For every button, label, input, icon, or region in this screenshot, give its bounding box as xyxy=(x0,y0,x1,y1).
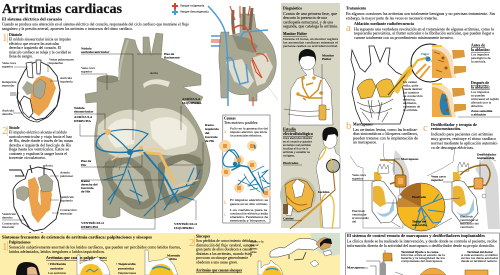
bottom panel: symptoms: provocan un síncope generalmente xyxy=(196,256,248,260)
labels: big heart: DERECHA xyxy=(74,119,92,123)
section 1: diastole: Diástole xyxy=(9,33,22,37)
panel: diagnosis: descarta la presencia de una xyxy=(283,16,327,20)
bottom panel: symptoms: • Fibrilación xyxy=(48,262,66,266)
labels: big heart: His xyxy=(81,163,87,167)
intro text xyxy=(2,18,189,32)
labels: heart in systole: Contracción xyxy=(2,222,19,226)
panel: diagnosis: Estudio xyxy=(283,128,296,132)
labels: big heart: Haz de xyxy=(81,159,92,163)
panel: remote monitoring: Terminal fijado a la cama. xyxy=(401,250,439,254)
intro text: Cuando se produce una alteración en el sistema eléctrico del corazón, responsable del ciclo cardíaco que mantiene el flujo xyxy=(2,22,189,28)
labels: before and after ablation: afectado por la xyxy=(471,100,492,104)
section b: pacemaker xyxy=(346,120,419,144)
labels: big heart: VENTRÍCULO xyxy=(174,221,197,226)
text: catheter: de conducción xyxy=(403,94,423,98)
small heart: blood flow xyxy=(208,6,278,106)
panel: remote monitoring: revisa los datos enviados xyxy=(461,256,499,260)
panel: remote monitoring: Marcapasos xyxy=(347,266,365,270)
panel: causes: alterados. Fenómenos de xyxy=(230,215,269,219)
labels: before and after ablation xyxy=(471,44,499,116)
labels: big heart: Bachmann xyxy=(164,56,180,60)
panel: causes: c xyxy=(224,213,227,218)
panel: causes: genera en un sitio erróneo. xyxy=(230,202,268,206)
section 2: systole: contraen y expulsan la sangre hacia el xyxy=(9,152,67,156)
labels: before and after ablation: ablación. xyxy=(471,104,483,108)
text: catheter: eléctrica, xyxy=(403,98,415,102)
panel: remote monitoring: El sistema de control remoto de marcapasos y desfibriladores implantables xyxy=(347,234,486,238)
section b: pacemaker: b xyxy=(346,120,352,132)
section a: radiofrequency ablation: Ablación mediante radiofrecuencia xyxy=(354,22,414,26)
labels: heart in diastole: Aurícula xyxy=(60,76,72,80)
labels: big heart: IZQUIERDO xyxy=(174,226,194,230)
bottom panel: symptoms: Las aurículas xyxy=(48,271,67,275)
text: catheter: Un catéter xyxy=(403,80,418,84)
labels: heart in systole: Arteria xyxy=(60,170,70,174)
section 1: diastole: eléctrico que recorre las aurículas xyxy=(9,42,59,46)
panel: remote monitoring: componentes del marcapasos. xyxy=(401,259,443,263)
magnifier: catheter tip: Calor xyxy=(421,52,430,56)
bottom panel: symptoms: 1 xyxy=(2,241,8,253)
labels: heart in diastole: Venas pulmonares xyxy=(49,58,74,62)
panel: causes: impulso eléctrico que inicia xyxy=(230,130,267,134)
labels: big heart: de His xyxy=(81,190,91,194)
labels: big heart: Haz de xyxy=(164,52,175,56)
labels: before and after ablation: a ablación xyxy=(471,112,486,116)
text: syncope note: y xyxy=(250,254,252,258)
labels: big heart: izquierda xyxy=(205,127,219,131)
labels: before and after ablation: Los impulsos xyxy=(471,90,490,94)
labels: heart in diastole: Vena cava xyxy=(2,61,16,65)
section b: pacemaker: pueden tratarse con la implantación de xyxy=(353,136,418,140)
conduction system pathways xyxy=(96,129,200,216)
panel: diagnosis: origen. xyxy=(283,154,295,158)
panel: diagnosis: Monitor Holter xyxy=(283,32,307,36)
defibrillator body illustration: superior xyxy=(431,178,444,182)
patient and devices xyxy=(364,261,384,275)
panel: remote monitoring: información directa de la actividad del marcapasos o desfibrilador desde su propio domicilio. xyxy=(347,244,495,248)
panel: diagnosis: Unos electrodos situados xyxy=(283,136,313,140)
magnifier: electrode: miocardio xyxy=(412,223,427,227)
panel: diagnosis: en el corazón y guiados xyxy=(283,140,313,144)
panel: diagnosis xyxy=(280,3,340,229)
text: catheter xyxy=(403,80,423,112)
labels: big heart: fascículo xyxy=(81,186,94,190)
labels: big heart: Nódulo xyxy=(74,106,85,110)
panel: diagnosis: electrofisiológico xyxy=(283,132,313,136)
section c: defibrillator: muy graves, restituye el ritmo cardíaco xyxy=(431,137,496,142)
labels: big heart xyxy=(74,46,219,230)
magnifier: electrode xyxy=(386,183,460,231)
section 1: diastole: llena de sangre. xyxy=(9,54,33,58)
section c: defibrillator: normal mediante la aplicación automáti- xyxy=(431,142,499,146)
labels: big heart: Nódulo xyxy=(81,46,92,50)
labels: before and after ablation: Después de xyxy=(471,81,489,85)
labels: heart in systole: derecho xyxy=(2,216,13,220)
labels: big heart: Vena cava xyxy=(81,66,95,70)
pacemaker body illustration: superior xyxy=(352,176,364,180)
legend: Sangre desoxigenada xyxy=(180,10,209,14)
text: syncope note: otras xyxy=(250,250,257,254)
bottom panel: symptoms: Mareado xyxy=(167,254,180,258)
section a: radiofrequency ablation: taquicardia paroxística, el flutter auricular o la fibrilación auricular, que pueden llegar a xyxy=(354,32,494,36)
panel: diagnosis: Diagnóstico xyxy=(283,6,302,10)
panel: causes: reentrada y bloqueos. xyxy=(230,218,266,222)
bottom panel: symptoms: Sensación subjetivamente anormal de los latidos cardíacos, que pueden ser percibidos como latidos fuertes, xyxy=(9,246,181,250)
bottom panel: symptoms: Palpitaciones xyxy=(118,271,137,275)
icon: heart paroxysmal tachycardia xyxy=(145,250,178,275)
section 1: diastole xyxy=(2,32,71,58)
defibrillator body illustration: implantable xyxy=(477,156,495,160)
section 2: systole: auriculoventricular y viaja hacia el haz xyxy=(9,135,72,139)
labels: electrophysiology xyxy=(283,161,330,220)
icon: heart fibrillation xyxy=(77,255,110,275)
text: syncope note xyxy=(250,240,264,258)
labels: big heart: DERECHO xyxy=(81,225,99,229)
text: catheter: la arritmia. xyxy=(403,108,418,112)
section c: defibrillator: ca de descargas eléctricas. xyxy=(431,146,474,150)
panel: remote monitoring: Terminal del doctor xyxy=(467,250,493,254)
heart with catheter line drawing xyxy=(351,46,416,124)
text: syncope note: ciales o la xyxy=(250,240,264,244)
pacemaker body illustration: Marcapasos xyxy=(401,157,419,161)
panel: diagnosis: paciente realiza su actividad normal. xyxy=(283,44,338,48)
labels: big heart: superior xyxy=(81,70,93,74)
labels: heart in systole xyxy=(2,164,77,229)
holter patient: Monitor xyxy=(322,54,335,58)
section 2: systole: torrente circulatorio. xyxy=(9,156,46,160)
inset heart with electrodes xyxy=(280,177,316,216)
defibrillator body illustration: ventricular al xyxy=(460,218,478,222)
section c: defibrillator: Indicado para pacientes con arritmias xyxy=(431,132,494,136)
panel: causes: Los caminos para la xyxy=(230,208,268,212)
panel: treatment intro: embargo, la mayor parte de las veces es necesario tratarlas. xyxy=(346,16,438,22)
labels: heart in diastole: izquierda xyxy=(60,80,73,84)
pacemaker body illustration: Vena cava xyxy=(352,173,366,177)
intro text: El sistema eléctrico del corazón xyxy=(2,18,63,22)
section a: radiofrequency ablation: Ha supuesto una verdadera revolución en el tratamiento de algunas arritmias, como la xyxy=(354,28,494,32)
legend: Sangre oxigenada xyxy=(180,4,205,8)
bottom panel: symptoms: obedecen a una causa grave. xyxy=(196,260,238,264)
bottom panel: symptoms: Síncopes xyxy=(196,234,211,238)
panel: causes xyxy=(219,115,271,223)
labels: before and after ablation: Los impulsos xyxy=(471,52,490,56)
section 1: diastole: El nódulo sinoauricular inicia un impulso xyxy=(9,38,71,42)
home terminal xyxy=(383,250,392,261)
panel: causes: a xyxy=(224,130,227,135)
icon: person with palpitations xyxy=(16,262,40,275)
section b: pacemaker: un marcapasos. xyxy=(353,140,377,144)
before and after ablation panels xyxy=(432,45,500,117)
big heart with conduction system xyxy=(85,33,210,219)
labels: heart in diastole: superior xyxy=(2,64,14,68)
bottom panel: symptoms: 2 xyxy=(189,237,194,249)
bottom panel: symptoms: Síntomas frecuentes de existencia de arritmia cardíaca: palpitaciones y síncopes xyxy=(2,236,153,240)
text: catheter: puede destruir xyxy=(403,87,423,91)
labels: big heart: IZQUIERDA xyxy=(182,101,202,105)
panel: diagnosis: Consta de una primera fase, que xyxy=(283,12,337,17)
text: catheter: los caminos xyxy=(403,90,420,94)
section 2: systole: derecha e izquierda del fascículo de His xyxy=(9,144,72,148)
section 2: systole: Sístole xyxy=(9,126,20,130)
diagram: heart in diastole xyxy=(10,60,60,122)
panel: treatment intro: Tratamiento xyxy=(346,6,366,10)
diagram: heart in systole xyxy=(9,165,61,240)
bottom panel: symptoms: auricular xyxy=(50,266,64,270)
labels: before and after ablation: la ablación: xyxy=(471,86,490,90)
section a: radiofrequency ablation: a xyxy=(346,22,351,34)
panel: causes: conducción eléctrica están xyxy=(230,212,268,216)
section 2: systole: 2 xyxy=(2,125,8,137)
defibrillator body illustration: miocardio del xyxy=(460,222,479,226)
bottom panel: symptoms: • Taquicardia xyxy=(116,262,136,266)
section 2: systole xyxy=(2,125,74,160)
panel: remote monitoring: A cada encuentro, el médico xyxy=(461,253,498,258)
bottom panel: symptoms: latidos adelantados, latidos irregulares o latidos taquicárdicos. xyxy=(9,250,105,255)
section b: pacemaker: dias sintomáticas o bloqueos cardíacos, xyxy=(353,132,418,137)
labels: big heart: Aorta xyxy=(150,71,158,75)
pacemaker body illustration: ventricular xyxy=(352,212,368,216)
labels: before and after ablation: no pueden xyxy=(471,94,485,98)
panel: diagnosis: localizar el foco de la xyxy=(283,146,308,150)
labels: big heart: AURÍCULA xyxy=(182,96,201,101)
magnifier: electrode: Tejido del xyxy=(412,220,426,224)
panel: remote monitoring: desde el terminal remoto. xyxy=(461,259,498,263)
labels: heart in systole: muscular xyxy=(60,212,73,216)
labels: heart in systole: Ventrículo xyxy=(60,195,74,199)
defibrillator body illustration: Desfibrilador xyxy=(477,152,497,156)
defibrillator body illustration: Electrodo xyxy=(460,214,473,218)
labels: heart in diastole xyxy=(2,58,74,116)
section c: defibrillator xyxy=(423,122,499,150)
section 2: systole: El impulso eléctrico alcanza el nódulo xyxy=(9,130,67,134)
labels: big heart: derecha del xyxy=(81,182,98,186)
text: catheter: causantes de xyxy=(403,104,421,108)
labels: before and after ablation: Antes de xyxy=(471,44,485,48)
bottom panel: symptoms: disminución del flujo cerebral, aunque xyxy=(196,244,254,248)
labels: big heart: sinoauricular xyxy=(74,110,94,114)
panel: diagnosis: cardiopatía estructural, y de una xyxy=(283,20,333,26)
defibrillator body illustration xyxy=(427,148,500,229)
panel: causes: El impulso eléctrico se xyxy=(230,198,269,202)
bottom panel: symptoms: Palpitaciones xyxy=(9,240,31,244)
labels: heart in systole: pulmonar xyxy=(60,174,74,178)
labels: heart in systole: Ventrículo xyxy=(2,212,16,216)
panel: causes: Fallo en la generación del xyxy=(230,126,268,130)
section c: defibrillator: c xyxy=(423,122,428,134)
section b: pacemaker: Las arritmias lentas, como las bradicar- xyxy=(353,128,419,133)
defibrillator body illustration: Vena cava xyxy=(431,174,446,178)
bottom panel: symptoms: Arritmias que causan síncopes xyxy=(196,268,242,272)
labels: heart in diastole: Aurícula xyxy=(2,108,14,112)
icon: fainted man with glow xyxy=(270,233,340,267)
labels: before and after ablation: Zona sometida xyxy=(471,109,493,113)
labels: electrophysiology: Incisión xyxy=(318,190,330,194)
labels: heart in systole: izquierdo xyxy=(60,198,73,202)
magnifier: catheter tip xyxy=(406,44,449,82)
section 1: diastole: derecha e izquierda del corazón. El xyxy=(9,46,61,50)
labels: heart in systole: Aorta xyxy=(45,164,53,168)
labels: before and after ablation: atravesar el tejido xyxy=(471,97,499,101)
panel: remote monitoring: Informa sobre el estado de la xyxy=(401,253,446,257)
magnifier: electrode: Electrodo xyxy=(412,195,426,199)
electrophysiology patient xyxy=(290,127,340,229)
labels: big heart: VENTRÍCULO xyxy=(81,220,104,225)
labels: heart in diastole: Relajación xyxy=(2,80,17,84)
labels: heart in systole: Contracción xyxy=(60,208,77,212)
holter patient: Holter xyxy=(322,57,332,61)
title: Arritmias cardiacas xyxy=(2,2,123,17)
bottom panel: symptoms xyxy=(0,233,340,275)
labels: big heart: Rama xyxy=(205,123,214,127)
labels: heart in diastole: muscular xyxy=(2,84,15,88)
labels: before and after ablation: la ablación: xyxy=(471,48,490,52)
conduction diagram xyxy=(219,140,271,198)
text: catheter: radia, quite xyxy=(403,84,419,88)
panel: treatment intro: En algunos ocasiones las arritmias son totalmente benignas y no precisan tratamiento. Sin xyxy=(346,12,495,16)
section a: radiofrequency ablation: curarse totalmente con un procedimiento mínimamente invasivo. xyxy=(354,36,454,40)
labels: before and after ablation: la aurícula. xyxy=(471,60,486,64)
section 2: systole: llega hasta los ventrículos. Éstos se xyxy=(9,146,69,152)
labels: big heart: fascículo xyxy=(205,135,218,139)
labels: big heart: de His xyxy=(205,139,215,143)
section 1: diastole: músculo cardíaco se relaja y la cavidad se xyxy=(9,50,71,54)
panel: causes: Tres motivos posibles: xyxy=(224,121,258,125)
panel: diagnosis: en tiempo real permiten xyxy=(283,143,311,147)
panel: diagnosis: arritmia y estudiar su xyxy=(283,150,310,154)
defibrillator body illustration: ventrículo xyxy=(460,225,474,229)
bottom panel: symptoms: gran parte de ellos obedecen a causas xyxy=(196,248,253,252)
bottom panel: symptoms: distintas a las arritmias, cuando éstas xyxy=(196,252,253,257)
labels: big heart: Rama xyxy=(81,179,90,183)
panel: diagnosis: Durante 24 horas, un monitor registra xyxy=(283,37,339,42)
text: catheter: anómalos, xyxy=(403,101,417,106)
panel: causes: Causas xyxy=(224,116,236,120)
bottom panel: symptoms: Son pérdidas de conocimiento debidas a xyxy=(196,239,256,243)
bottom panel: symptoms: Arritmias que causan palpitaciones: xyxy=(46,256,107,260)
text: syncope note: ritmo xyxy=(250,246,258,250)
labels: electrophysiology: Electrodos xyxy=(283,161,299,165)
section 1: diastole: 1 xyxy=(2,32,8,44)
panel: causes: b xyxy=(224,201,227,206)
labels: electrophysiology: Catéter xyxy=(283,216,294,220)
labels: heart in systole: muscular xyxy=(2,225,15,229)
labels: big heart: del xyxy=(205,131,209,135)
labels: big heart: AURÍCULA xyxy=(74,114,93,119)
legend xyxy=(172,3,209,15)
intro text: sanguíneo y la presión arterial, aparecen las arritmias o trastornos del ritmo cardíaco. xyxy=(2,27,133,32)
bottom panel: symptoms: súbito xyxy=(168,257,177,261)
section a: radiofrequency ablation xyxy=(346,22,494,40)
text: syncope note: mayor xyxy=(250,243,260,247)
labels: heart in diastole: izquierdas xyxy=(49,61,64,65)
panel: remote monitoring: batería y la integridad de los xyxy=(401,256,446,260)
holter patient xyxy=(284,49,335,125)
pacemaker body illustration: Electrodo xyxy=(352,209,365,213)
labels: before and after ablation: patológicos de xyxy=(471,56,491,60)
section b: pacemaker: Marcapasos xyxy=(353,122,373,126)
panel: treatment intro xyxy=(346,6,495,22)
panel: causes: los potenciales eléctricos. xyxy=(230,134,262,138)
panel: remote monitoring xyxy=(346,233,500,275)
panel: diagnosis: las anomalías cardíacas mientras el xyxy=(283,40,338,44)
section 2: systole: de His, desde donde a través de las ramas xyxy=(9,139,74,144)
section c: defibrillator: resincronización. xyxy=(431,127,461,131)
pacemaker body illustration: del xyxy=(352,220,356,224)
panel: diagnosis: segunda, que cataloga la arritmia. xyxy=(283,24,338,30)
icon: heart syncope xyxy=(258,260,283,275)
labels: big heart: auriculoventricular xyxy=(81,50,110,54)
pacemaker body illustration: al miocardio xyxy=(352,216,369,220)
bottom panel: symptoms: paroxística xyxy=(118,266,134,270)
pacemaker body illustration xyxy=(350,143,419,228)
labels: heart in diastole: derecha xyxy=(2,112,13,116)
section c: defibrillator: Desfibrilador y terapia de xyxy=(431,123,477,127)
panel: remote monitoring: La clínica donde se ha realizado la intervención, y desde donde se controla al paciente, recibe xyxy=(347,240,497,244)
